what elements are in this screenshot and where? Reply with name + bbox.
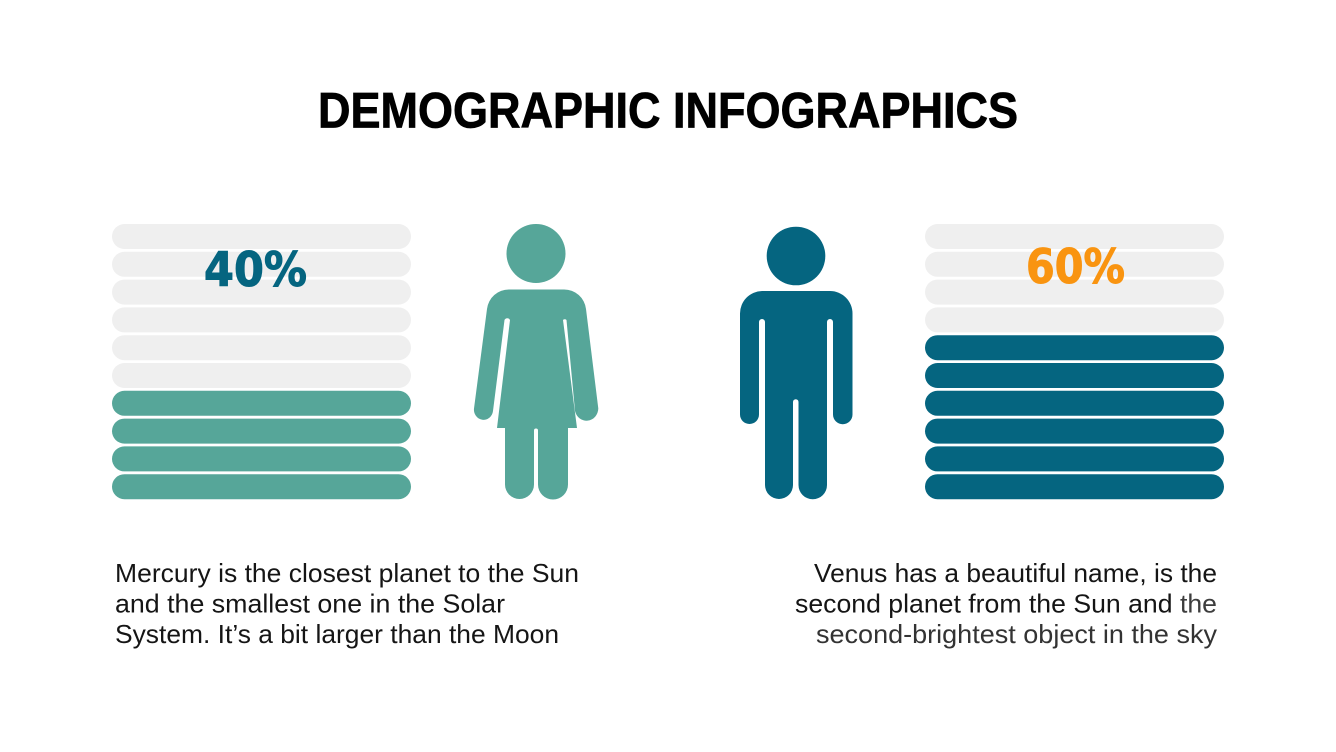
title: DEMOGRAPHIC INFOGRAPHICS (318, 82, 1018, 138)
icon: man (740, 227, 852, 499)
text block: Mercury: Mercury is the closest planet to the Sun (115, 558, 579, 588)
panel: left bar chart 40% (112, 224, 411, 499)
left percentage: 40% (204, 243, 307, 298)
text block: Venus: second-brightest object in the sky (816, 619, 1217, 649)
text block: Mercury (115, 558, 579, 649)
right percentage: 60% (1026, 240, 1125, 295)
panel: right bar chart 60% (925, 224, 1224, 499)
text block: Venus: Venus has a beautiful name, is the (814, 558, 1217, 588)
text block: Venus: second planet from the Sun and the (795, 588, 1217, 618)
text block: Mercury: System. It’s a bit larger than the Moon (115, 619, 559, 649)
text block: Mercury: and the smallest one in the Solar (115, 588, 505, 618)
icon: woman (474, 224, 598, 500)
text block: Venus (795, 558, 1217, 649)
